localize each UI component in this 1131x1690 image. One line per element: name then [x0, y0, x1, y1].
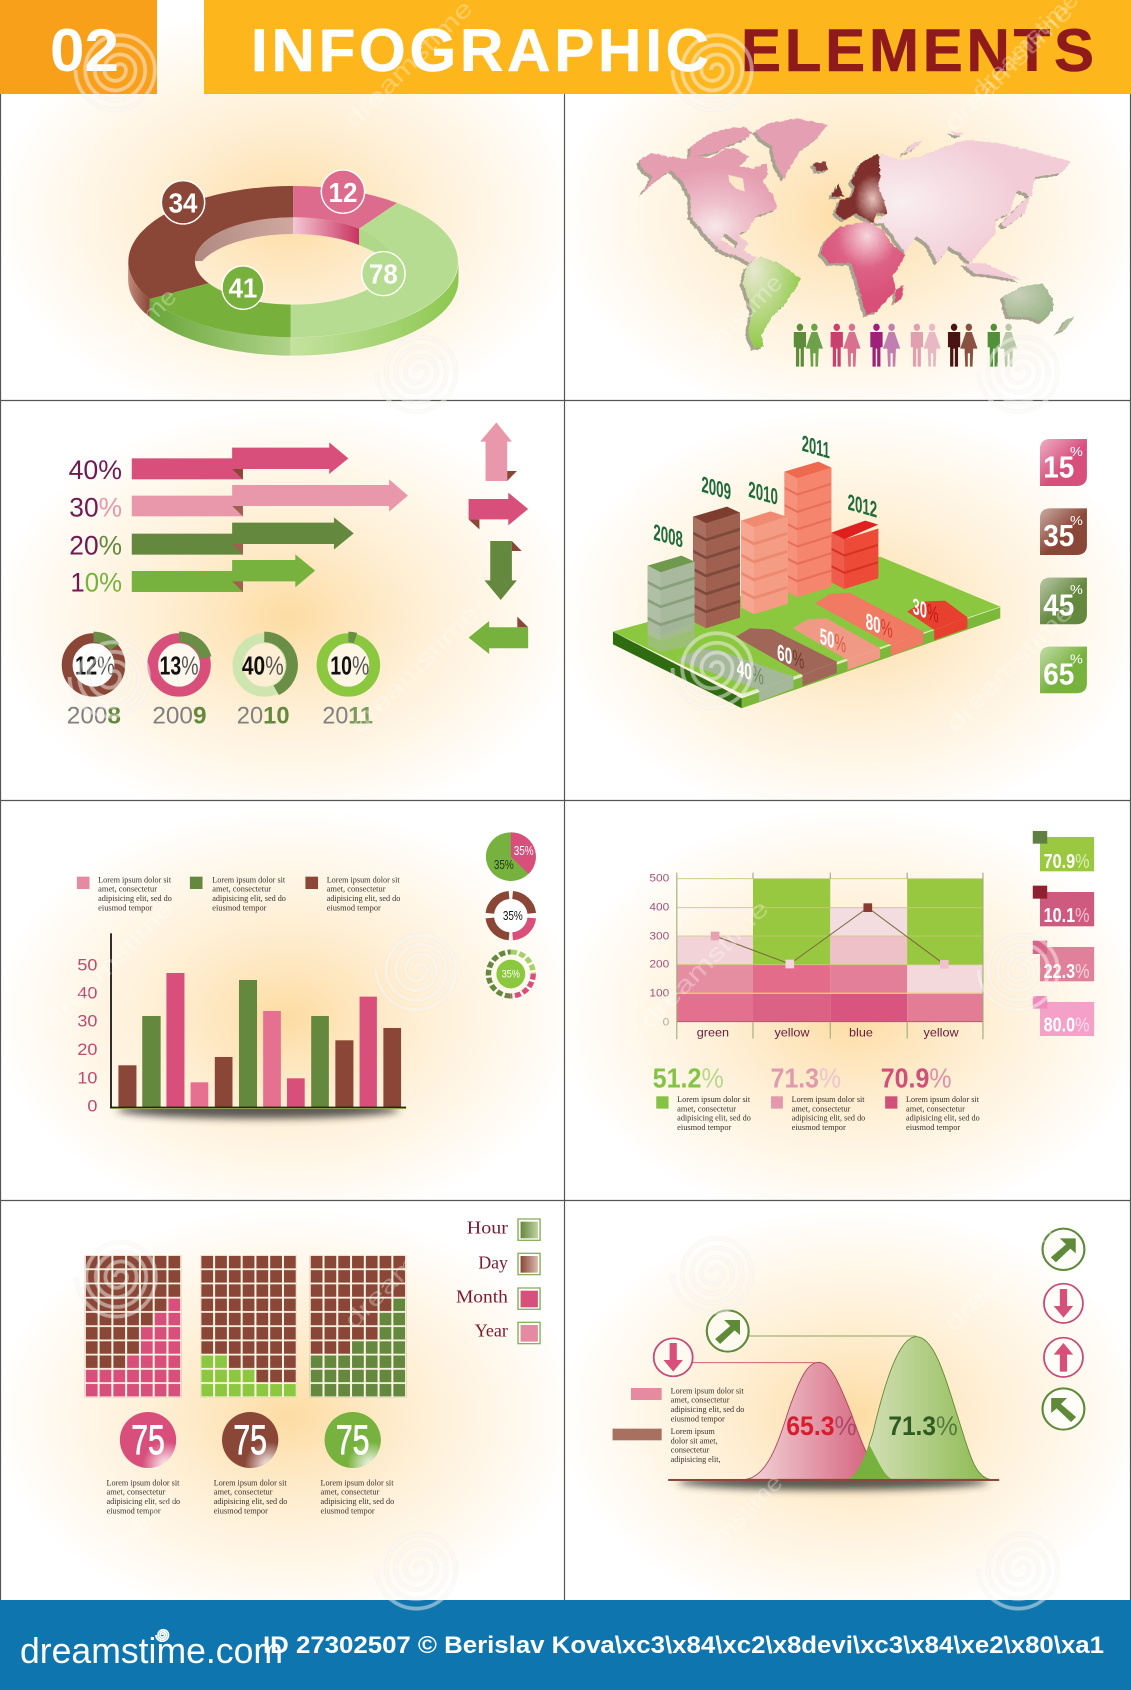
bar 2012 [831, 490, 878, 589]
value badge 12 [321, 170, 365, 213]
legend text pink: amet, consectetur [671, 1395, 730, 1405]
stat 70.9% [881, 1064, 980, 1132]
overlap area [848, 1445, 893, 1479]
arrow bar 30%: 30% [69, 492, 122, 522]
legend item green: amet, consectetur [212, 884, 271, 894]
value 65.3%: 65.3% [786, 1411, 857, 1441]
legend: hour: Hour [467, 1218, 509, 1238]
panel: column chart [24, 829, 552, 1200]
strip 30% [907, 594, 967, 640]
axis labels [77, 955, 97, 1115]
axis labels: 400 [649, 902, 669, 914]
mini dashed ring chart [488, 952, 533, 996]
legend item green: adipisicing elit, sed do [212, 893, 286, 903]
arrow bar 10%: 10% [70, 568, 122, 597]
tag 65% [1040, 647, 1087, 693]
strip 50%: 50% [820, 624, 846, 659]
legend text pink: eiusmod tempor [671, 1414, 725, 1423]
chart shadow [117, 1101, 399, 1119]
value badge 78 [362, 252, 405, 296]
arrow bar 20% [69, 517, 354, 560]
watermarks: dreamstime [40, 895, 179, 1034]
stat 71.3% [771, 1064, 866, 1132]
arrow bar 40%: 40% [69, 455, 122, 485]
value badge 34 [161, 181, 205, 224]
legend text pink [631, 1386, 745, 1423]
legend: month: Month [456, 1287, 508, 1307]
caption 3: adipisicing elit, sed do [321, 1496, 395, 1506]
panel: bell curves [589, 1228, 1118, 1600]
value badge 78: 78 [369, 260, 398, 290]
tag 15%: 15 [1043, 450, 1074, 484]
tag 15% [1040, 439, 1087, 486]
strip 40% [678, 650, 793, 702]
bar 2010: 2010 [748, 477, 778, 511]
progress ring 2009: 13% [160, 651, 199, 680]
axis labels: 300 [649, 931, 669, 942]
icon: up-right arrow [1043, 1229, 1084, 1270]
strip 80%: 80% [866, 609, 893, 644]
strip 50% [793, 618, 880, 670]
stat 70.9%: amet, consectetur [906, 1104, 965, 1113]
header: title [204, 0, 1131, 94]
icon: down arrow [1044, 1284, 1083, 1323]
icon: up arrow [1044, 1338, 1083, 1377]
legend text brown [613, 1426, 721, 1464]
axis labels: 30 [77, 1011, 97, 1030]
bar 2008 [648, 520, 695, 652]
legend item brown: eiusmod tempor [327, 903, 381, 912]
legend text brown: consectetur [671, 1445, 709, 1455]
progress ring 2010: 2010 [237, 702, 290, 729]
icon: up-left arrow [1043, 1388, 1084, 1430]
caption 2: Lorem ipsum dolor sit [214, 1478, 287, 1487]
legend item pink: amet, consectetur [98, 884, 157, 894]
axis labels [649, 873, 669, 1028]
tag 45%: 45 [1043, 587, 1074, 622]
watermarks: dreamstime [64, 1483, 182, 1601]
platform [613, 557, 1000, 708]
strip 60%: 60% [777, 640, 804, 675]
arrow left [469, 617, 528, 654]
axis labels: 100 [649, 988, 669, 1000]
caption 1: Lorem ipsum dolor sit [106, 1478, 180, 1487]
watermarks: dreamstime [940, 598, 1079, 737]
bars [118, 973, 401, 1107]
tag 65%: % [1070, 651, 1083, 666]
value badge 41: 41 [229, 274, 258, 304]
axis labels: 500 [649, 873, 669, 885]
value 71.3%: 71.3% [888, 1411, 958, 1441]
axis labels: 10 [77, 1068, 97, 1087]
bar 2011: 2011 [802, 431, 830, 464]
progress ring 2008: 2008 [67, 702, 121, 729]
value badge 34: 34 [169, 188, 198, 219]
arrow down [484, 541, 522, 600]
legend item pink [77, 875, 172, 912]
bar 2009 [693, 472, 740, 628]
watermarks: dreamstime [635, 895, 774, 1034]
badge 75 green: 75 [336, 1418, 369, 1464]
legend text brown: dolor sit amet, [671, 1436, 718, 1445]
mini ring chart [490, 895, 532, 936]
baseline [668, 1479, 999, 1481]
icon: up-right arrow on curve [707, 1310, 749, 1352]
stat 51.2%: Lorem ipsum dolor sit [677, 1094, 751, 1104]
bar 2010 [741, 477, 788, 614]
legend text pink: adipisicing elit, sed do [671, 1404, 745, 1414]
arrow bar 40% [69, 442, 348, 485]
tag 35% [1040, 508, 1087, 555]
arrow right [469, 493, 528, 529]
watermarks: dreamstime [670, 269, 788, 387]
header: section number [0, 0, 157, 94]
axis labels: 0 [663, 1017, 669, 1028]
stat 51.2%: adipisicing elit, sed do [677, 1113, 751, 1123]
legend text brown: Lorem ipsum [671, 1426, 715, 1436]
tag 70.9% [1033, 831, 1094, 873]
arrow bar 20%: 20% [69, 531, 122, 560]
tag 65%: 65 [1043, 656, 1074, 691]
caption 1: amet, consectetur [106, 1487, 165, 1497]
legend: day: Day [478, 1253, 508, 1273]
people icons [794, 324, 1017, 367]
tag 22.3%: 22.3% [1044, 960, 1089, 983]
tag 35%: % [1070, 513, 1083, 528]
stat 70.9%: 70.9% [881, 1064, 952, 1094]
watermarks: dreamstime [339, 0, 478, 134]
tag 15%: % [1070, 444, 1083, 459]
caption 3: amet, consectetur [321, 1487, 379, 1497]
badge 75 pink [120, 1412, 176, 1468]
panel: arrows and progress rings [1, 401, 564, 800]
legend item pink: adipisicing elit, sed do [98, 893, 172, 903]
tag 45%: % [1070, 582, 1083, 597]
caption 1 [106, 1478, 181, 1515]
progress ring 2008: 12% [75, 651, 115, 680]
panel: stacked chart with line [566, 801, 1130, 1200]
legend item brown: amet, consectetur [327, 884, 386, 894]
waffle grid 1 [85, 1255, 181, 1397]
line series [711, 903, 949, 969]
watermarks: dreamstime [939, 1198, 1078, 1337]
strip 80% [815, 593, 923, 656]
panel: world map [566, 0, 1130, 400]
caption 2: amet, consectetur [214, 1487, 273, 1497]
connector lines [692, 1336, 916, 1363]
mini pie chart: 35% [494, 857, 514, 872]
legend item green: eiusmod tempor [212, 903, 266, 912]
waffle grid 2 [200, 1255, 297, 1397]
tag 70.9%: 70.9% [1044, 850, 1089, 873]
strip 40%: 40% [737, 656, 764, 691]
progress ring 2010: 40% [242, 651, 284, 680]
tag 80.0% [1033, 996, 1094, 1036]
watermarks: dreamstime [64, 283, 182, 401]
green bell curve [848, 1337, 990, 1479]
progress ring 2011: 10% [330, 651, 369, 680]
legend item brown: Lorem ipsum dolor sit [327, 875, 400, 884]
progress ring 2009 [152, 637, 206, 729]
badge 75 brown: 75 [233, 1418, 267, 1464]
bar 2012: 2012 [848, 490, 877, 523]
tag 22.3% [1033, 941, 1094, 983]
hudson bay [728, 175, 745, 192]
legend: day [478, 1253, 540, 1275]
waffle grid 3 [310, 1255, 406, 1397]
panel: waffle grids [1, 1201, 564, 1600]
strip 30%: 30% [913, 594, 939, 629]
caption 2 [214, 1478, 288, 1515]
footer: credit bar: ID 27302507 © Berislav Kova\xc3\x84\xc2\x8devi\xc3\x84\xe2\x80\xa1 [263, 1632, 1104, 1659]
axis labels: 40 [77, 983, 97, 1002]
mini ring chart: 35% [503, 908, 523, 923]
footer: credit bar [0, 1600, 1131, 1690]
value badge 41 [222, 266, 264, 309]
stat 71.3%: Lorem ipsum dolor sit [792, 1094, 865, 1104]
header: section number: 02 [50, 17, 119, 84]
stat 70.9%: eiusmod tempor [906, 1122, 960, 1132]
progress ring 2009: 2009 [152, 702, 206, 729]
badge 75 green [325, 1412, 381, 1468]
watermarks: dreamstime [339, 1195, 478, 1334]
mini dashed ring chart: 35% [502, 967, 520, 981]
baseline shadow [678, 1474, 988, 1490]
caption 1: eiusmod tempor [106, 1506, 161, 1515]
tag 10.1% [1033, 886, 1094, 927]
stat 71.3%: eiusmod tempor [792, 1122, 846, 1132]
legend: month [456, 1287, 540, 1309]
axis labels: 0 [87, 1096, 97, 1115]
stat 71.3%: amet, consectetur [792, 1104, 850, 1113]
legend text brown: adipisicing elit, [671, 1454, 721, 1464]
category labels: blue [849, 1026, 873, 1040]
stat 70.9%: Lorem ipsum dolor sit [906, 1094, 979, 1104]
footer: credit bar: dreamstime.com [20, 1630, 283, 1671]
category labels: yellow [924, 1026, 959, 1040]
caption 2: adipisicing elit, sed do [214, 1496, 288, 1506]
arrow bar 10% [70, 554, 315, 597]
axis labels: 20 [77, 1040, 97, 1059]
stat 51.2% [653, 1064, 751, 1132]
axes [110, 933, 406, 1109]
stat 51.2%: 51.2% [653, 1064, 724, 1094]
stat 71.3%: 71.3% [771, 1064, 841, 1094]
progress ring 2011: 2011 [322, 702, 373, 729]
value badge 12: 12 [329, 178, 357, 209]
arrow up [480, 422, 517, 481]
legend: hour [467, 1218, 540, 1240]
caption 3: Lorem ipsum dolor sit [321, 1478, 394, 1487]
panel: isometric bar chart [566, 401, 1130, 800]
bar 2011 [784, 431, 831, 597]
category labels [697, 1026, 959, 1040]
legend item brown: adipisicing elit, sed do [327, 893, 401, 903]
progress ring 2008 [67, 637, 121, 729]
progress ring 2011 [322, 637, 375, 729]
category labels: green [697, 1026, 729, 1040]
strip 60% [736, 628, 837, 686]
bar 2008: 2008 [653, 520, 683, 553]
badge 75 pink: 75 [131, 1418, 165, 1464]
donut chart [128, 170, 458, 356]
tag 35%: 35 [1043, 518, 1074, 553]
legend item green [190, 875, 286, 912]
legend text pink: Lorem ipsum dolor sit [671, 1386, 744, 1395]
panel: donut chart [1, 0, 564, 400]
bar 2009: 2009 [701, 472, 731, 506]
stat 71.3%: adipisicing elit, sed do [792, 1113, 866, 1123]
axis labels: 50 [77, 955, 97, 974]
legend: year: Year [475, 1321, 509, 1341]
axis labels: 200 [649, 959, 669, 971]
arrow bar 30% [69, 479, 408, 522]
category labels: yellow [774, 1026, 810, 1040]
legend item pink: Lorem ipsum dolor sit [98, 875, 172, 884]
progress ring 2010 [237, 637, 292, 729]
caption 3 [321, 1478, 395, 1515]
tag 10.1%: 10.1% [1044, 904, 1089, 927]
caption 2: eiusmod tempor [214, 1506, 268, 1515]
tag 45% [1040, 578, 1087, 624]
legend item brown [305, 875, 401, 912]
stat 70.9%: adipisicing elit, sed do [906, 1113, 980, 1123]
header: title: INFOGRAPHIC [251, 17, 709, 84]
mini pie chart: 35% [514, 843, 534, 858]
watermarks: dreamstime [345, 600, 484, 739]
world map [640, 118, 1075, 367]
mini pie chart [486, 832, 536, 881]
caption 3: eiusmod tempor [321, 1506, 375, 1515]
icon: down arrow on curve [654, 1338, 693, 1376]
stat 51.2%: eiusmod tempor [677, 1122, 731, 1132]
legend: year [475, 1321, 540, 1344]
caption 1: adipisicing elit, sed do [106, 1496, 181, 1506]
tag 80.0%: 80.0% [1044, 1013, 1089, 1036]
header: title: ELEMENTS [741, 17, 1094, 84]
stat 51.2%: amet, consectetur [677, 1104, 736, 1113]
watermarks: dreamstime [939, 0, 1078, 137]
watermarks: dreamstime [670, 1469, 788, 1587]
badge 75 brown [222, 1412, 278, 1468]
legend item pink: eiusmod tempor [98, 903, 152, 912]
pink bell curve [745, 1362, 893, 1479]
stacked columns [677, 879, 983, 1022]
legend item green: Lorem ipsum dolor sit [212, 875, 286, 884]
